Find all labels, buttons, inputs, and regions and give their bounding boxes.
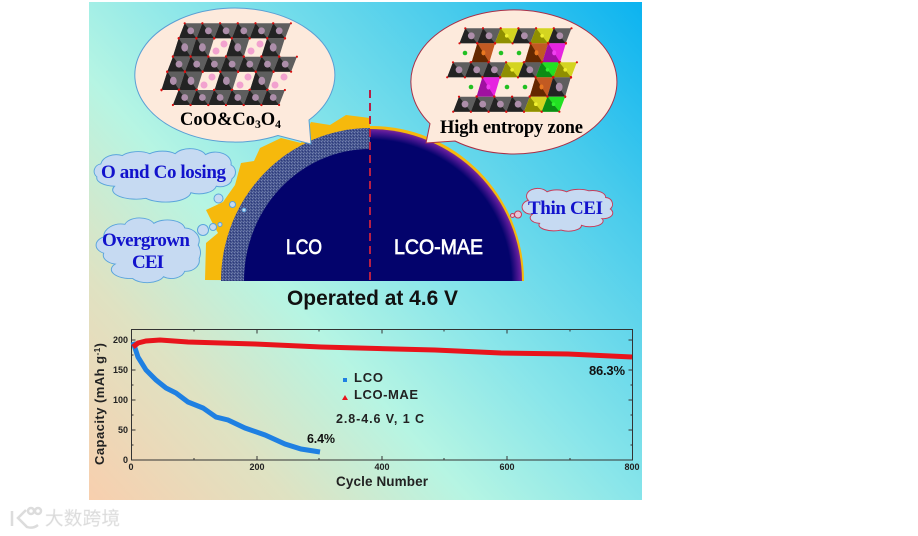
bubble bbox=[411, 10, 617, 154]
legend: LCO bbox=[354, 370, 383, 385]
y tick labels: 0 bbox=[123, 455, 128, 465]
retention: 6.4%: 6.4% bbox=[307, 432, 335, 446]
bubble bbox=[135, 8, 335, 144]
callout: CoO and Co3O4 crystal bbox=[135, 8, 335, 144]
watermark text: 大数跨境 bbox=[45, 508, 120, 529]
cloud: Overgrown CEI: Overgrown bbox=[102, 230, 190, 251]
retention: 86.3%: 86.3% bbox=[589, 363, 625, 378]
x tick labels: 400 bbox=[374, 462, 390, 472]
label: CoO&Co3O4: 4 bbox=[275, 117, 281, 131]
y tick labels: 50 bbox=[118, 425, 128, 435]
LCO-MAE core bbox=[370, 129, 522, 281]
y axis title: ) bbox=[92, 343, 107, 347]
label: CoO&Co3O4: CoO&Co bbox=[180, 109, 257, 130]
test conditions: 2.8-4.6 V, 1 C bbox=[336, 412, 424, 426]
degraded surface ring bbox=[221, 128, 370, 281]
crystal structure bbox=[160, 22, 298, 106]
thin CEI layer bbox=[370, 126, 524, 281]
crystal structure bbox=[446, 27, 578, 113]
label: High entropy zone: High entropy zone bbox=[440, 118, 583, 138]
x tick labels bbox=[128, 462, 640, 472]
y tick labels: 150 bbox=[113, 365, 128, 375]
y tick labels bbox=[113, 335, 128, 465]
icon: thought bubbles left bbox=[198, 194, 246, 236]
particle cross-section diagram bbox=[205, 90, 524, 281]
series: LCO-MAE bbox=[133, 340, 632, 357]
x tick labels: 200 bbox=[249, 462, 265, 472]
series: LCO bbox=[133, 342, 320, 452]
label: LCO: LCO bbox=[286, 236, 322, 259]
x tick labels: 0 bbox=[128, 462, 134, 472]
x axis title: Cycle Number bbox=[336, 474, 429, 489]
background panel bbox=[89, 2, 642, 500]
watermark bbox=[12, 508, 120, 529]
y tick labels: 100 bbox=[113, 395, 128, 405]
plot frame and ticks bbox=[132, 330, 632, 460]
y axis title: -1 bbox=[93, 347, 102, 355]
icon: watermark logo bbox=[12, 508, 41, 528]
y axis title: Capacity (mAh g bbox=[92, 356, 107, 465]
heading: Operated at 4.6 V: Operated at 4.6 V bbox=[287, 287, 458, 310]
capacity line chart bbox=[92, 330, 640, 489]
overgrown CEI layer bbox=[205, 115, 370, 281]
cloud: O and Co losing: O and Co losing bbox=[101, 162, 226, 183]
label: LCO-MAE: LCO-MAE bbox=[394, 236, 483, 259]
cloud: Overgrown CEI: CEI bbox=[132, 252, 164, 273]
x tick labels: 800 bbox=[624, 462, 640, 472]
callout: high entropy zone crystal bbox=[411, 10, 617, 154]
legend bbox=[342, 370, 418, 402]
cloud: Overgrown CEI bbox=[96, 218, 200, 283]
y tick labels: 200 bbox=[113, 335, 128, 345]
cloud: Thin CEI: Thin CEI bbox=[528, 198, 603, 219]
x tick labels: 600 bbox=[499, 462, 515, 472]
cloud: O and Co losing bbox=[94, 149, 235, 202]
label: CoO&Co3O4: 3 bbox=[255, 117, 261, 131]
LCO core bbox=[244, 149, 370, 281]
divider line bbox=[369, 90, 371, 281]
label: CoO&Co3O4: O bbox=[261, 109, 275, 130]
legend: LCO-MAE bbox=[354, 387, 418, 402]
cloud: Thin CEI bbox=[510, 188, 613, 231]
